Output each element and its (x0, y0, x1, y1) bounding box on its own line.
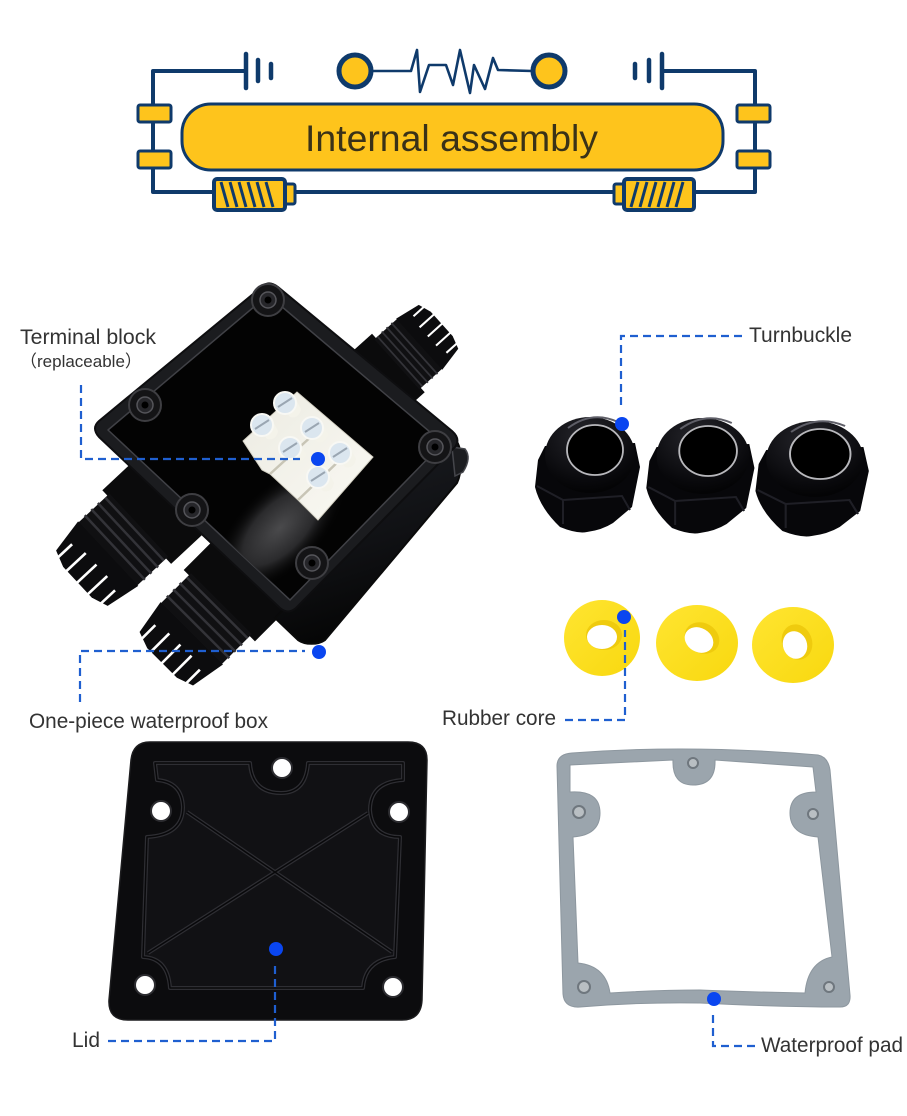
icon: left coil (214, 179, 295, 210)
left terminal tabs (138, 105, 171, 168)
box rim (95, 283, 457, 612)
callout: turnbuckle: Turnbuckle (749, 324, 852, 347)
photo: lid (109, 742, 427, 1020)
right terminal tabs (737, 105, 770, 168)
lid inner ridge (143, 763, 403, 988)
floor highlight (224, 486, 332, 582)
corner screw post: right (419, 431, 451, 463)
callout: one-piece waterproof box (29, 645, 326, 733)
box interior (107, 307, 430, 601)
cable gland: top right (335, 294, 469, 426)
mounting tab (452, 447, 468, 476)
pad screw holes (573, 758, 834, 993)
callout: terminal block: （replaceable） (20, 352, 142, 371)
icon: left battery (246, 54, 271, 88)
corner screw post: lower left (176, 494, 208, 526)
icon: right battery (635, 54, 662, 88)
corner screw post: left (129, 389, 161, 421)
photo: waterproof pad (557, 749, 850, 1007)
photo: one-piece waterproof box with terminal block (42, 283, 469, 700)
callout: one-piece waterproof box: One-piece waterproof box (29, 710, 269, 733)
lid cross ribs (148, 812, 392, 953)
callout: rubber core: Rubber core (442, 707, 556, 730)
photo: yellow rubber cores (564, 600, 834, 683)
callout: waterproof pad (707, 992, 903, 1057)
callout: lid (72, 942, 283, 1052)
icon: right coil (614, 179, 694, 210)
lid screw holes (135, 758, 409, 997)
callout: rubber core (442, 610, 631, 730)
cable gland: bottom (125, 521, 304, 700)
callout: terminal block (20, 326, 325, 466)
banner: circuit frame with title (138, 50, 770, 210)
icon: resistor with terminals (339, 50, 565, 93)
corner screw post: bottom (296, 547, 328, 579)
title: Internal assembly (305, 117, 598, 159)
callout: lid: Lid (72, 1029, 100, 1052)
callout: waterproof pad: Waterproof pad (761, 1034, 903, 1057)
cable gland: left (42, 442, 222, 621)
corner screw post: top (252, 284, 284, 316)
screw terminals (251, 392, 356, 491)
callout: turnbuckle (615, 324, 852, 431)
title pill (182, 104, 723, 170)
lid plate (109, 742, 427, 1020)
box side wall (275, 440, 461, 644)
terminal block (243, 392, 373, 520)
circuit frame wires (153, 71, 755, 192)
callout: terminal block: Terminal block (20, 326, 157, 349)
photo: turnbuckle nuts (535, 417, 869, 536)
